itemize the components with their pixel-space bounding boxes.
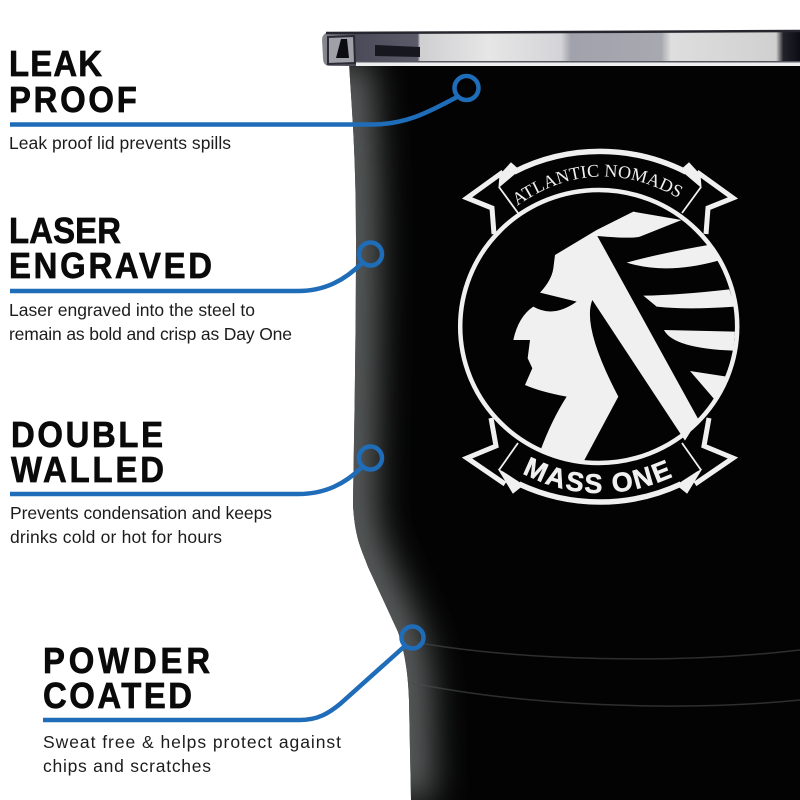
heading: ENGRAVED bbox=[9, 246, 212, 286]
heading: PROOF bbox=[9, 80, 137, 120]
ring marker bbox=[454, 76, 478, 100]
description bbox=[43, 732, 341, 776]
leader line bbox=[10, 97, 457, 124]
heading bbox=[9, 44, 137, 120]
callout: double walled bbox=[10, 415, 382, 547]
description: Sweat free & helps protect against bbox=[43, 732, 341, 752]
heading: DOUBLE bbox=[11, 415, 163, 455]
description bbox=[9, 300, 292, 344]
bottom banner and tails bbox=[467, 418, 733, 502]
heading bbox=[43, 641, 210, 716]
description: Prevents condensation and keeps bbox=[10, 503, 272, 523]
leader line bbox=[10, 263, 362, 291]
logo: Atlantic Nomads Mass One emblem bbox=[458, 148, 740, 505]
description: remain as bold and crisp as Day One bbox=[9, 324, 292, 344]
leader line bbox=[43, 645, 406, 720]
heading bbox=[11, 415, 164, 490]
top banner and tails bbox=[467, 151, 733, 234]
heading: WALLED bbox=[11, 450, 164, 490]
description: chips and scratches bbox=[43, 756, 211, 776]
ring marker bbox=[359, 446, 382, 470]
heading bbox=[9, 211, 212, 286]
heading: COATED bbox=[43, 676, 192, 716]
heading: POWDER bbox=[43, 641, 210, 681]
banner text top: ATLANTIC NOMADS bbox=[515, 164, 682, 206]
banner text bottom: MASS ONE bbox=[523, 456, 672, 494]
ring marker bbox=[402, 626, 424, 648]
callout: leak proof bbox=[9, 44, 478, 153]
callout: powder coated bbox=[43, 626, 424, 776]
callout: laser engraved bbox=[9, 211, 382, 344]
tumbler lid bbox=[322, 31, 800, 66]
heading: LASER bbox=[9, 211, 121, 251]
description bbox=[10, 503, 272, 547]
description: drinks cold or hot for hours bbox=[10, 527, 222, 547]
heading: LEAK bbox=[9, 44, 102, 84]
head and feathers bbox=[513, 212, 735, 462]
emblem circle bbox=[460, 190, 737, 463]
description: Laser engraved into the steel to bbox=[9, 300, 255, 320]
leader line bbox=[10, 467, 362, 494]
ring marker bbox=[359, 242, 382, 266]
tumbler body bbox=[349, 62, 800, 800]
description: Leak proof lid prevents spills bbox=[9, 133, 231, 153]
